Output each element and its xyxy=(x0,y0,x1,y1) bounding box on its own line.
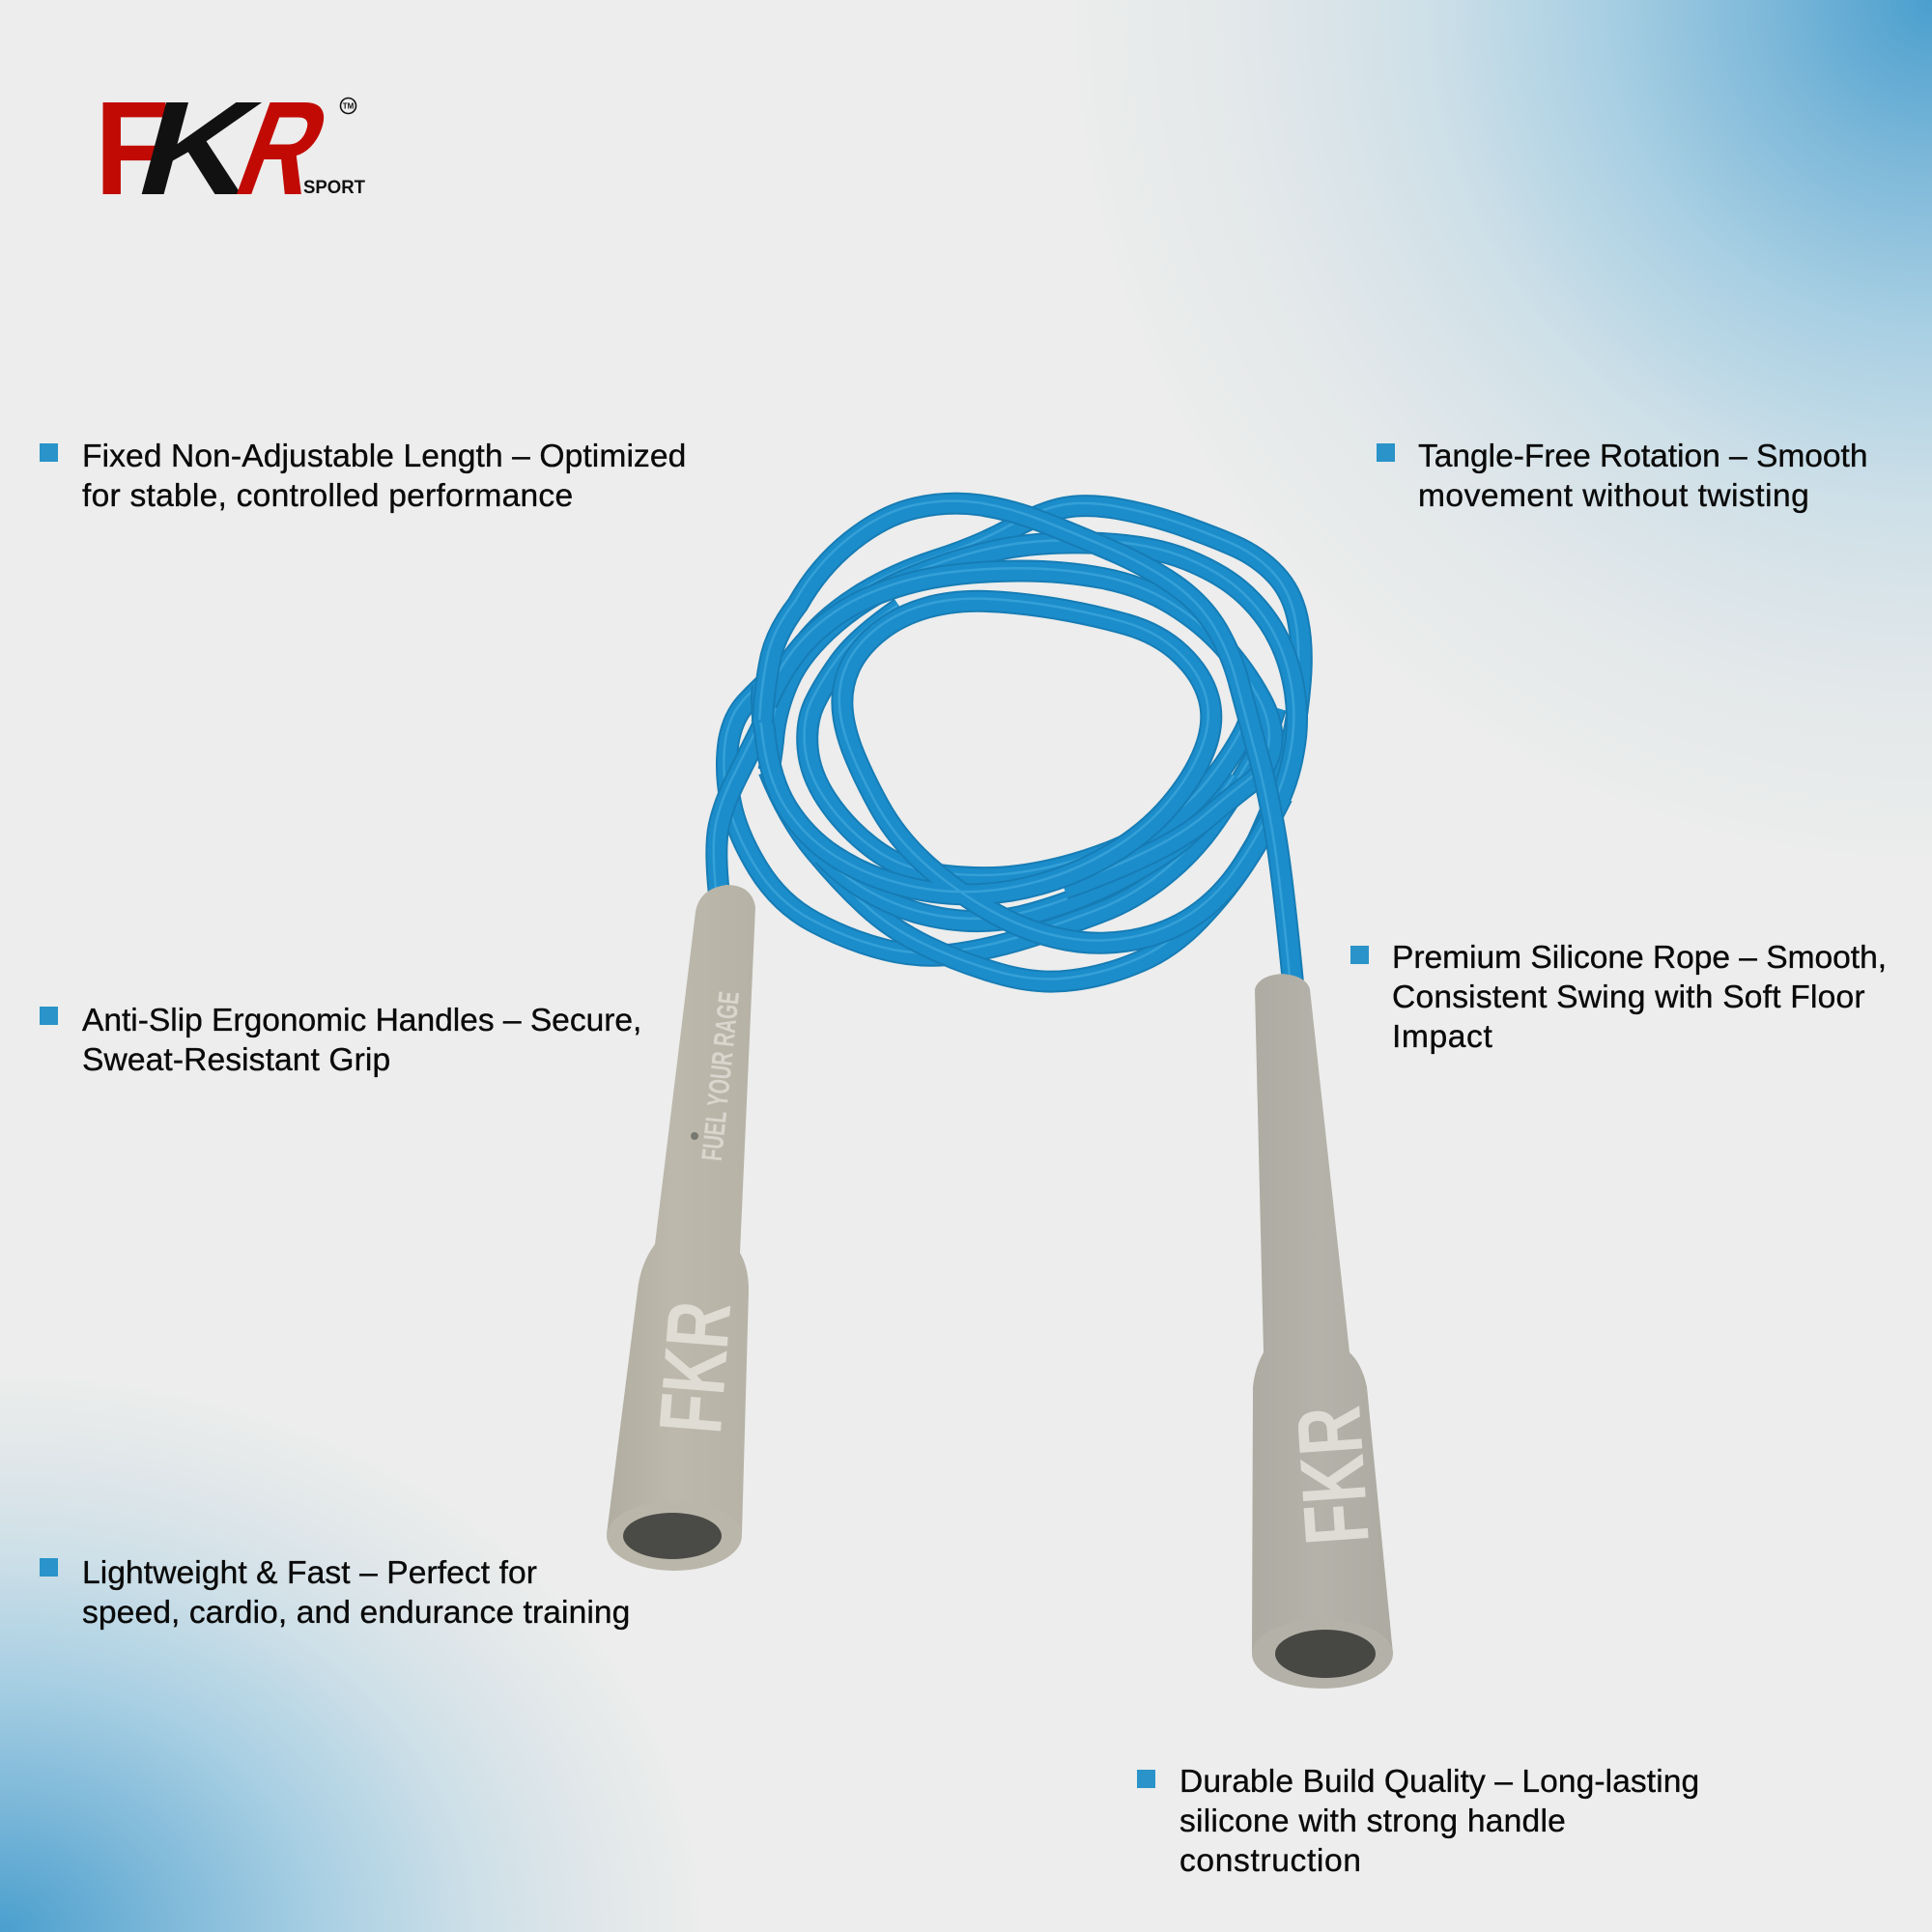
logo: FKR Sport: TM xyxy=(343,102,355,110)
blue coiled rope xyxy=(714,500,1301,981)
left handle xyxy=(607,885,755,1571)
feature: handles xyxy=(40,1003,641,1078)
feature: handles: Anti-Slip Ergonomic Handles – Secure, xyxy=(82,1003,641,1038)
feature: tangle-free: movement without twisting xyxy=(1418,478,1809,514)
feature: silicone rope: Impact xyxy=(1392,1019,1492,1055)
feature: tangle-free: Tangle-Free Rotation – Smooth xyxy=(1418,439,1867,474)
logo: FKR Sport: SPORT xyxy=(303,177,365,198)
left handle: FUEL YOUR RAGE xyxy=(696,990,746,1162)
feature: silicone rope: Premium Silicone Rope – Smooth, xyxy=(1392,940,1887,976)
feature: durable build: silicone with strong handle xyxy=(1179,1804,1566,1839)
feature: fixed length: Fixed Non-Adjustable Length – Optimized xyxy=(82,439,686,474)
right handle xyxy=(1252,974,1393,1689)
logo: FKR Sport xyxy=(95,73,365,223)
logo: FKR Sport: R xyxy=(219,74,347,223)
feature: lightweight xyxy=(40,1555,630,1631)
logo: FKR Sport: F xyxy=(95,74,170,223)
feature: silicone rope: Consistent Swing with Soft Floor xyxy=(1392,980,1865,1015)
feature: fixed length xyxy=(40,439,686,514)
feature: handles: Sweat-Resistant Grip xyxy=(82,1042,390,1078)
feature: silicone rope xyxy=(1350,940,1887,1055)
right handle: FKR xyxy=(1277,1404,1388,1548)
left handle: FKR xyxy=(641,1298,750,1436)
feature: tangle-free xyxy=(1377,439,1867,514)
logo: FKR Sport: K xyxy=(124,73,274,222)
feature: durable build: construction xyxy=(1179,1843,1362,1879)
feature: durable build xyxy=(1137,1764,1699,1879)
feature: fixed length: for stable, controlled performance xyxy=(82,478,573,514)
feature: durable build: Durable Build Quality – Long-lasting xyxy=(1179,1764,1699,1800)
feature: lightweight: speed, cardio, and endurance training xyxy=(82,1595,630,1631)
feature: lightweight: Lightweight & Fast – Perfect for xyxy=(82,1555,537,1591)
